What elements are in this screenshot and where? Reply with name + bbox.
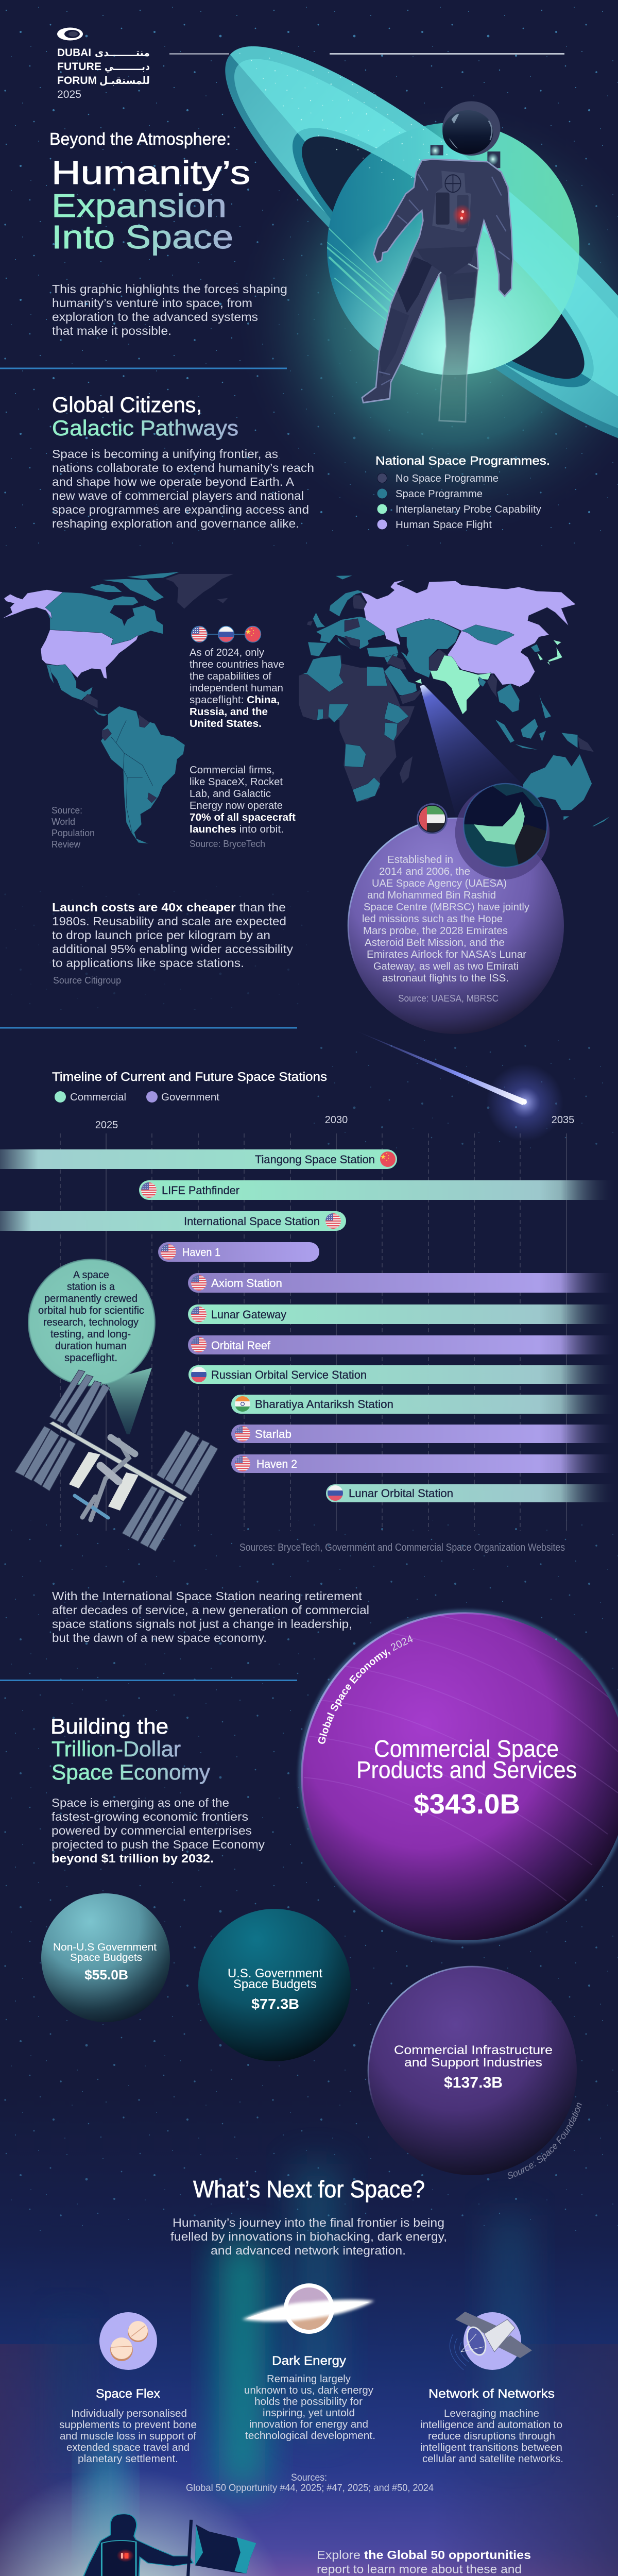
bar: Lunar Gateway: Lunar Gateway <box>211 1308 286 1321</box>
beam from UAE <box>420 685 522 819</box>
source: global 50 <box>186 2472 434 2494</box>
bar: Starlab <box>231 1425 618 1443</box>
callout: three countries: Russia, and the <box>190 706 268 718</box>
title: Humanity’s <box>52 154 250 191</box>
bar: Haven 1: Haven 1 <box>182 1246 220 1259</box>
callout: what is a space station: research, technology <box>43 1316 139 1328</box>
flag: USA <box>192 626 207 642</box>
body text: global citizens: new wave of commercial players and national <box>52 489 304 502</box>
bar: Lunar Orbital Station <box>326 1484 618 1502</box>
bar: Haven 1 <box>158 1242 319 1262</box>
planet: commercial products and services <box>297 1608 618 1945</box>
intro text: humanity’s venture into space, from <box>52 296 252 310</box>
callout: three countries: As of 2024, only <box>190 647 265 658</box>
divider <box>0 368 287 369</box>
planet: commercial products and services: $343.0B <box>414 1789 520 1820</box>
legend: national space programmes: Interplanetary Probe Capability <box>396 504 541 515</box>
text: explore global 50: report to learn more about these and <box>317 2563 522 2576</box>
callout: three countries: three countries have <box>190 658 284 670</box>
logo: Dubai Future Forum: FUTURE <box>57 61 101 73</box>
timeline axis: 2025 <box>95 1120 118 1131</box>
callout: three countries: spaceflight: China, <box>190 694 280 706</box>
callout: what is a space station: spaceflight. <box>64 1352 117 1364</box>
logo: Dubai Future Forum: 2025 <box>57 89 81 100</box>
body text: global citizens: nations collaborate to extend humanity’s reach <box>52 461 314 474</box>
body text: ISS retirement: but the dawn of a new space economy. <box>52 1631 267 1645</box>
source: world population review: World <box>52 817 75 827</box>
timeline axis <box>60 1114 574 1531</box>
title: Beyond the Atmosphere: <box>49 129 231 148</box>
bar: Lunar Orbital Station: Lunar Orbital Station <box>349 1487 453 1500</box>
bar: Tiangong: Tiangong Space Station <box>255 1153 375 1166</box>
body text: what's next: fuelled by innovations in biohacking, dark energy, <box>170 2230 447 2243</box>
bar: Starlab: Starlab <box>255 1428 291 1440</box>
text: dark energy: Remaining largely <box>267 2373 351 2385</box>
callout: what is a space station: permanently crewed <box>44 1293 138 1304</box>
Africa <box>299 655 415 802</box>
callout: three countries: independent human <box>190 682 283 694</box>
icon: astronaut with flag <box>66 2514 276 2576</box>
text: network of networks: Network of Networks <box>428 2387 555 2401</box>
heading: trillion dollar space economy: Trillion-Dollar <box>52 1737 181 1761</box>
legend: national space programmes: Human Space Flight <box>396 519 492 531</box>
UAE text: Mars probe, the 2028 Emirates <box>363 925 508 937</box>
icon: satellite <box>450 2312 532 2370</box>
text: dark energy: Dark Energy <box>272 2354 346 2368</box>
logo: Dubai Future Forum: FORUM <box>57 75 97 87</box>
callout: three countries: United States. <box>190 718 262 730</box>
suit silhouette <box>66 2514 193 2576</box>
heading: trillion dollar space economy: Space Economy <box>52 1760 210 1784</box>
icon: space flex pills <box>99 2312 157 2370</box>
body text: ISS retirement: after decades of service, a new generation of commercial <box>52 1603 369 1617</box>
planet: commercial infrastructure: $137.3B <box>444 2074 503 2091</box>
body text: what's next: Humanity’s journey into the final frontier is being <box>173 2216 444 2229</box>
bar: ISS <box>0 1211 346 1231</box>
body text: global citizens: space programmes are expanding access and <box>52 503 309 516</box>
callout: commercial firms: Lab, and Galactic <box>190 788 271 800</box>
flag: Russia <box>218 626 234 642</box>
flag <box>195 2524 256 2573</box>
UAE text: Emirates Airlock for NASA’s Lunar <box>367 948 526 960</box>
aurora sky background <box>0 2087 618 2576</box>
callout: commercial firms: Energy now operate <box>190 800 283 811</box>
callout: three countries <box>190 626 284 730</box>
divider <box>0 1027 297 1028</box>
modules <box>75 1437 135 1520</box>
text: space flex <box>59 2387 197 2465</box>
bar: LIFE Pathfinder: LIFE Pathfinder <box>162 1184 239 1197</box>
callout: commercial firms <box>190 764 296 849</box>
source: world population review: Population <box>52 828 95 838</box>
bar: Bharatiya Antariksh Station: Bharatiya Antariksh Station <box>255 1398 393 1411</box>
text: dark energy: innovation for energy and <box>249 2418 368 2430</box>
UAE text: UAE Space Agency (UAESA) <box>372 877 507 889</box>
intro text: that make it possible. <box>52 324 171 337</box>
source: world population review <box>52 805 95 850</box>
UAE text: Source: UAESA, MBRSC <box>398 993 499 1004</box>
bar: Orbital Reef: Orbital Reef <box>211 1339 271 1352</box>
divider <box>0 1680 297 1681</box>
body text: ISS retirement: With the International Space Station nearing retirement <box>52 1589 362 1603</box>
body text: ISS retirement: space stations signals not just a change in leadership, <box>52 1617 352 1631</box>
launch cost text: 1980s. Reusability and scale are expected <box>52 914 286 928</box>
Greenland <box>165 574 234 609</box>
source: world population review: Review <box>52 839 81 850</box>
bar: Lunar Gateway <box>188 1304 618 1324</box>
text: space flex: extended space travel and <box>66 2442 190 2453</box>
flag pole <box>182 2520 191 2576</box>
body text: space economy: projected to push the Space Economy <box>52 1838 265 1851</box>
timeline heading and legend <box>52 1070 327 1103</box>
helmet <box>442 101 500 156</box>
body text: space economy: fastest-growing economic frontiers <box>52 1810 248 1823</box>
source: global 50: Sources: <box>291 2472 327 2483</box>
Southeast Asia and Oceania <box>479 644 610 826</box>
Alaska <box>2 590 63 619</box>
planet: US government space budgets: $77.3B <box>251 1996 299 2012</box>
intro text: exploration to the advanced systems <box>52 310 258 324</box>
body text: what's next: and advanced network integration. <box>211 2244 406 2257</box>
launch cost text: Source Citigroup <box>53 975 121 986</box>
planet: commercial products and services: Commercial Space <box>374 1735 559 1762</box>
logo: Dubai Future Forum <box>57 28 150 100</box>
body text: what's next <box>170 2216 447 2257</box>
heading: Global Citizens: Galactic Pathways <box>52 416 238 440</box>
source: timeline: Sources: BryceTech, Government and Commercial Space Organization Websites <box>239 1542 565 1553</box>
planet disc <box>327 123 579 375</box>
UAE text: astronaut flights to the ISS. <box>382 972 509 984</box>
rear of rings <box>182 0 618 499</box>
bar: Tiangong <box>0 1149 397 1169</box>
chest panel <box>432 171 471 232</box>
body text: global citizens: and shape how we operate beyond Earth. A <box>52 475 294 488</box>
heading: Global Citizens: Global Citizens, <box>52 393 202 417</box>
UAE on map <box>415 679 422 684</box>
callout: commercial firms: 70% of all spacecraft <box>190 811 296 823</box>
UAE text: Gateway, as well as two Emirati <box>373 960 519 972</box>
body text: space economy: beyond $1 trillion by 2032. <box>52 1852 214 1865</box>
planet: non-US government space budgets: Space Budgets <box>70 1952 142 1963</box>
callout: three countries: the capabilities of <box>190 670 271 682</box>
text: space flex: Individually personalised <box>71 2408 187 2419</box>
text: space flex: Space Flex <box>96 2387 160 2401</box>
UAE text: Space Centre (MBRSC) have jointly <box>364 901 530 913</box>
callout: commercial firms: like SpaceX, Rocket <box>190 776 283 788</box>
bar: Axiom Station <box>188 1273 618 1293</box>
text: explore global 50: Explore the Global 50 opportunities <box>317 2548 531 2562</box>
legend: national space programmes <box>375 454 550 531</box>
callout: what is a space station: duration human <box>55 1340 127 1352</box>
UAE text <box>362 854 530 1004</box>
source: world population review: Source: <box>52 805 82 816</box>
Mexico <box>46 665 108 717</box>
launch cost text <box>52 901 293 986</box>
planet: US government space budgets <box>198 1909 351 2061</box>
text: dark energy: holds the possibility for <box>254 2396 363 2408</box>
solar arrays <box>15 1370 218 1551</box>
bar: Bharatiya Antariksh Station <box>231 1395 618 1414</box>
legend: national space programmes: No Space Programme <box>396 473 499 484</box>
body text: global citizens: reshaping exploration and governance alike. <box>52 517 299 530</box>
suit <box>362 159 513 403</box>
panel: UAE planet <box>348 782 564 1034</box>
planet: non-US government space budgets: $55.0B <box>84 1967 128 1982</box>
logo: Dubai Future Forum: منتــــــــدى <box>95 46 150 59</box>
South America <box>101 706 185 844</box>
text: dark energy <box>244 2354 375 2442</box>
callout: commercial firms: Commercial firms, <box>190 764 274 776</box>
title <box>49 129 250 256</box>
planet: US government space budgets: U.S. Government <box>228 1967 322 1980</box>
source: global 50: Global 50 Opportunity #44, 2025; #47, 2025; and #50, 2024 <box>186 2483 434 2494</box>
timeline bars <box>0 1149 618 1502</box>
text: space flex: planetary settlement. <box>78 2453 178 2465</box>
callout: what is a space station: A space <box>73 1269 109 1281</box>
callout: commercial firms: launches into orbit. <box>190 823 284 835</box>
timeline heading and legend: Timeline of Current and Future Space Stations <box>52 1070 327 1084</box>
legend: national space programmes: National Space Programmes. <box>375 454 550 467</box>
planet: commercial products and services: Products and Services <box>356 1756 577 1783</box>
callout: what is a space station: orbital hub for scientific <box>38 1304 144 1316</box>
bar: Axiom Station: Axiom Station <box>211 1277 282 1290</box>
truss <box>49 1421 187 1501</box>
text: network of networks: cellular and satellite networks. <box>422 2453 563 2465</box>
bar: Orbital Reef <box>188 1335 618 1354</box>
Russia and China <box>361 580 576 687</box>
mini map globe of UAE <box>455 782 551 880</box>
text: space flex: supplements to prevent bone <box>59 2419 197 2431</box>
heading: Global Citizens <box>52 393 238 440</box>
heading: what's next: What’s Next for Space? <box>193 2176 425 2202</box>
timeline axis: 2035 <box>552 1114 574 1126</box>
India <box>430 655 491 715</box>
body text: ISS retirement <box>52 1589 369 1645</box>
bar: LIFE Pathfinder <box>139 1180 618 1200</box>
flag: UAE <box>417 803 448 834</box>
United States <box>41 630 139 679</box>
bar: Russian Orbital Service Station <box>188 1365 618 1384</box>
body text: space economy: Space is emerging as one of the <box>52 1796 229 1809</box>
UAE text: Established in <box>387 854 453 866</box>
text: dark energy: unknown to us, dark energy <box>244 2384 374 2396</box>
text: explore global 50 <box>317 2548 531 2576</box>
planet: commercial infrastructure <box>368 1966 577 2175</box>
legend: national space programmes: Space Programme <box>396 488 483 500</box>
Central Asia and Middle East <box>367 619 459 696</box>
Canada <box>45 572 180 645</box>
UAE text: Asteroid Belt Mission, and the <box>365 937 505 948</box>
planet: non-US government space budgets: Non-U.S Government <box>53 1942 157 1953</box>
title: Expansion <box>52 187 227 224</box>
text: network of networks: intelligent transitions between <box>420 2442 562 2453</box>
launch cost text: to applications like space stations. <box>52 956 244 970</box>
world map: the Americas <box>2 572 234 844</box>
title: Into Space <box>52 218 233 256</box>
callout: what is a space station: station is a <box>67 1281 115 1293</box>
source: space foundation: Source: Space Foundation <box>508 2103 582 2179</box>
bar: Haven 2 <box>231 1454 618 1473</box>
text: space flex: and muscle loss in support of <box>60 2430 196 2442</box>
planet: commercial infrastructure: Commercial Infrastructure <box>394 2043 553 2057</box>
UAE text: and Mohammed Bin Rashid <box>367 889 496 901</box>
planet: commercial infrastructure: and Support Industries <box>404 2056 542 2070</box>
launch cost text: to drop launch price per kilogram by an <box>52 928 270 942</box>
intro text: This graphic highlights the forces shaping <box>52 282 287 296</box>
body text: space economy: powered by commercial enterprises <box>52 1824 252 1837</box>
heading: trillion dollar space economy: Building the <box>50 1714 168 1738</box>
timeline axis: 2030 <box>325 1114 348 1126</box>
body text: global citizens <box>52 447 314 530</box>
intro text <box>52 282 287 337</box>
planet: non-US government space budgets <box>41 1893 170 2022</box>
icon: comet <box>355 1030 563 1141</box>
timeline heading and legend: Commercial <box>70 1092 126 1103</box>
bar: ISS: International Space Station <box>184 1215 320 1228</box>
ring sparkles <box>220 0 485 240</box>
front of rings <box>218 0 618 456</box>
callout: what is a space station <box>28 1259 156 1434</box>
Europe <box>308 575 386 656</box>
callout: commercial firms: Source: BryceTech <box>190 839 265 849</box>
launch cost text: Launch costs are 40x cheaper than the <box>52 901 286 914</box>
UAE text: led missions such as the Hope <box>362 913 503 925</box>
body text: global citizens: Space is becoming a unifying frontier, as <box>52 447 278 461</box>
timeline heading and legend: Government <box>161 1092 219 1103</box>
callout: what is a space station: testing, and long- <box>50 1328 131 1340</box>
world map: Eurasia, Africa, Oceania <box>299 575 610 826</box>
text: network of networks: Leveraging machine <box>444 2408 539 2419</box>
icon: International Space Station <box>15 1370 218 1551</box>
text: dark energy: technological development. <box>245 2430 375 2442</box>
divider line <box>169 53 564 55</box>
bar: Russian Orbital Service Station: Russian Orbital Service Station <box>211 1368 367 1381</box>
icon: dark energy black hole <box>242 2283 374 2334</box>
text: network of networks: reduce disruptions through <box>428 2430 555 2442</box>
text: network of networks <box>420 2387 563 2465</box>
planet: commercial products and services: Global Space Economy, 2024 <box>318 1635 413 1744</box>
planet: US government space budgets: Space Budgets <box>233 1977 317 1991</box>
heading: trillion dollar space economy <box>50 1714 210 1784</box>
icon: astronaut <box>362 101 513 422</box>
bar: Haven 2: Haven 2 <box>256 1458 297 1470</box>
logo: Dubai Future Forum: DUBAI <box>57 47 91 59</box>
UAE text: 2014 and 2006, the <box>379 866 470 877</box>
radiators <box>69 1452 100 1488</box>
hero illustration: planet and rings <box>225 46 618 523</box>
body text: space economy <box>52 1796 265 1865</box>
text: network of networks: intelligence and automation to <box>420 2419 562 2431</box>
flag: China <box>245 626 261 642</box>
Mongolia <box>461 625 514 645</box>
icon: eye logo <box>57 28 83 40</box>
red lights <box>453 205 472 226</box>
logo: Dubai Future Forum: للمستقبـل <box>99 74 150 87</box>
text: dark energy: inspiring, yet untold <box>263 2407 355 2419</box>
launch cost text: additional 95% enabling wider accessibility <box>52 942 293 956</box>
logo: Dubai Future Forum: دبـــــــــي <box>105 60 150 73</box>
